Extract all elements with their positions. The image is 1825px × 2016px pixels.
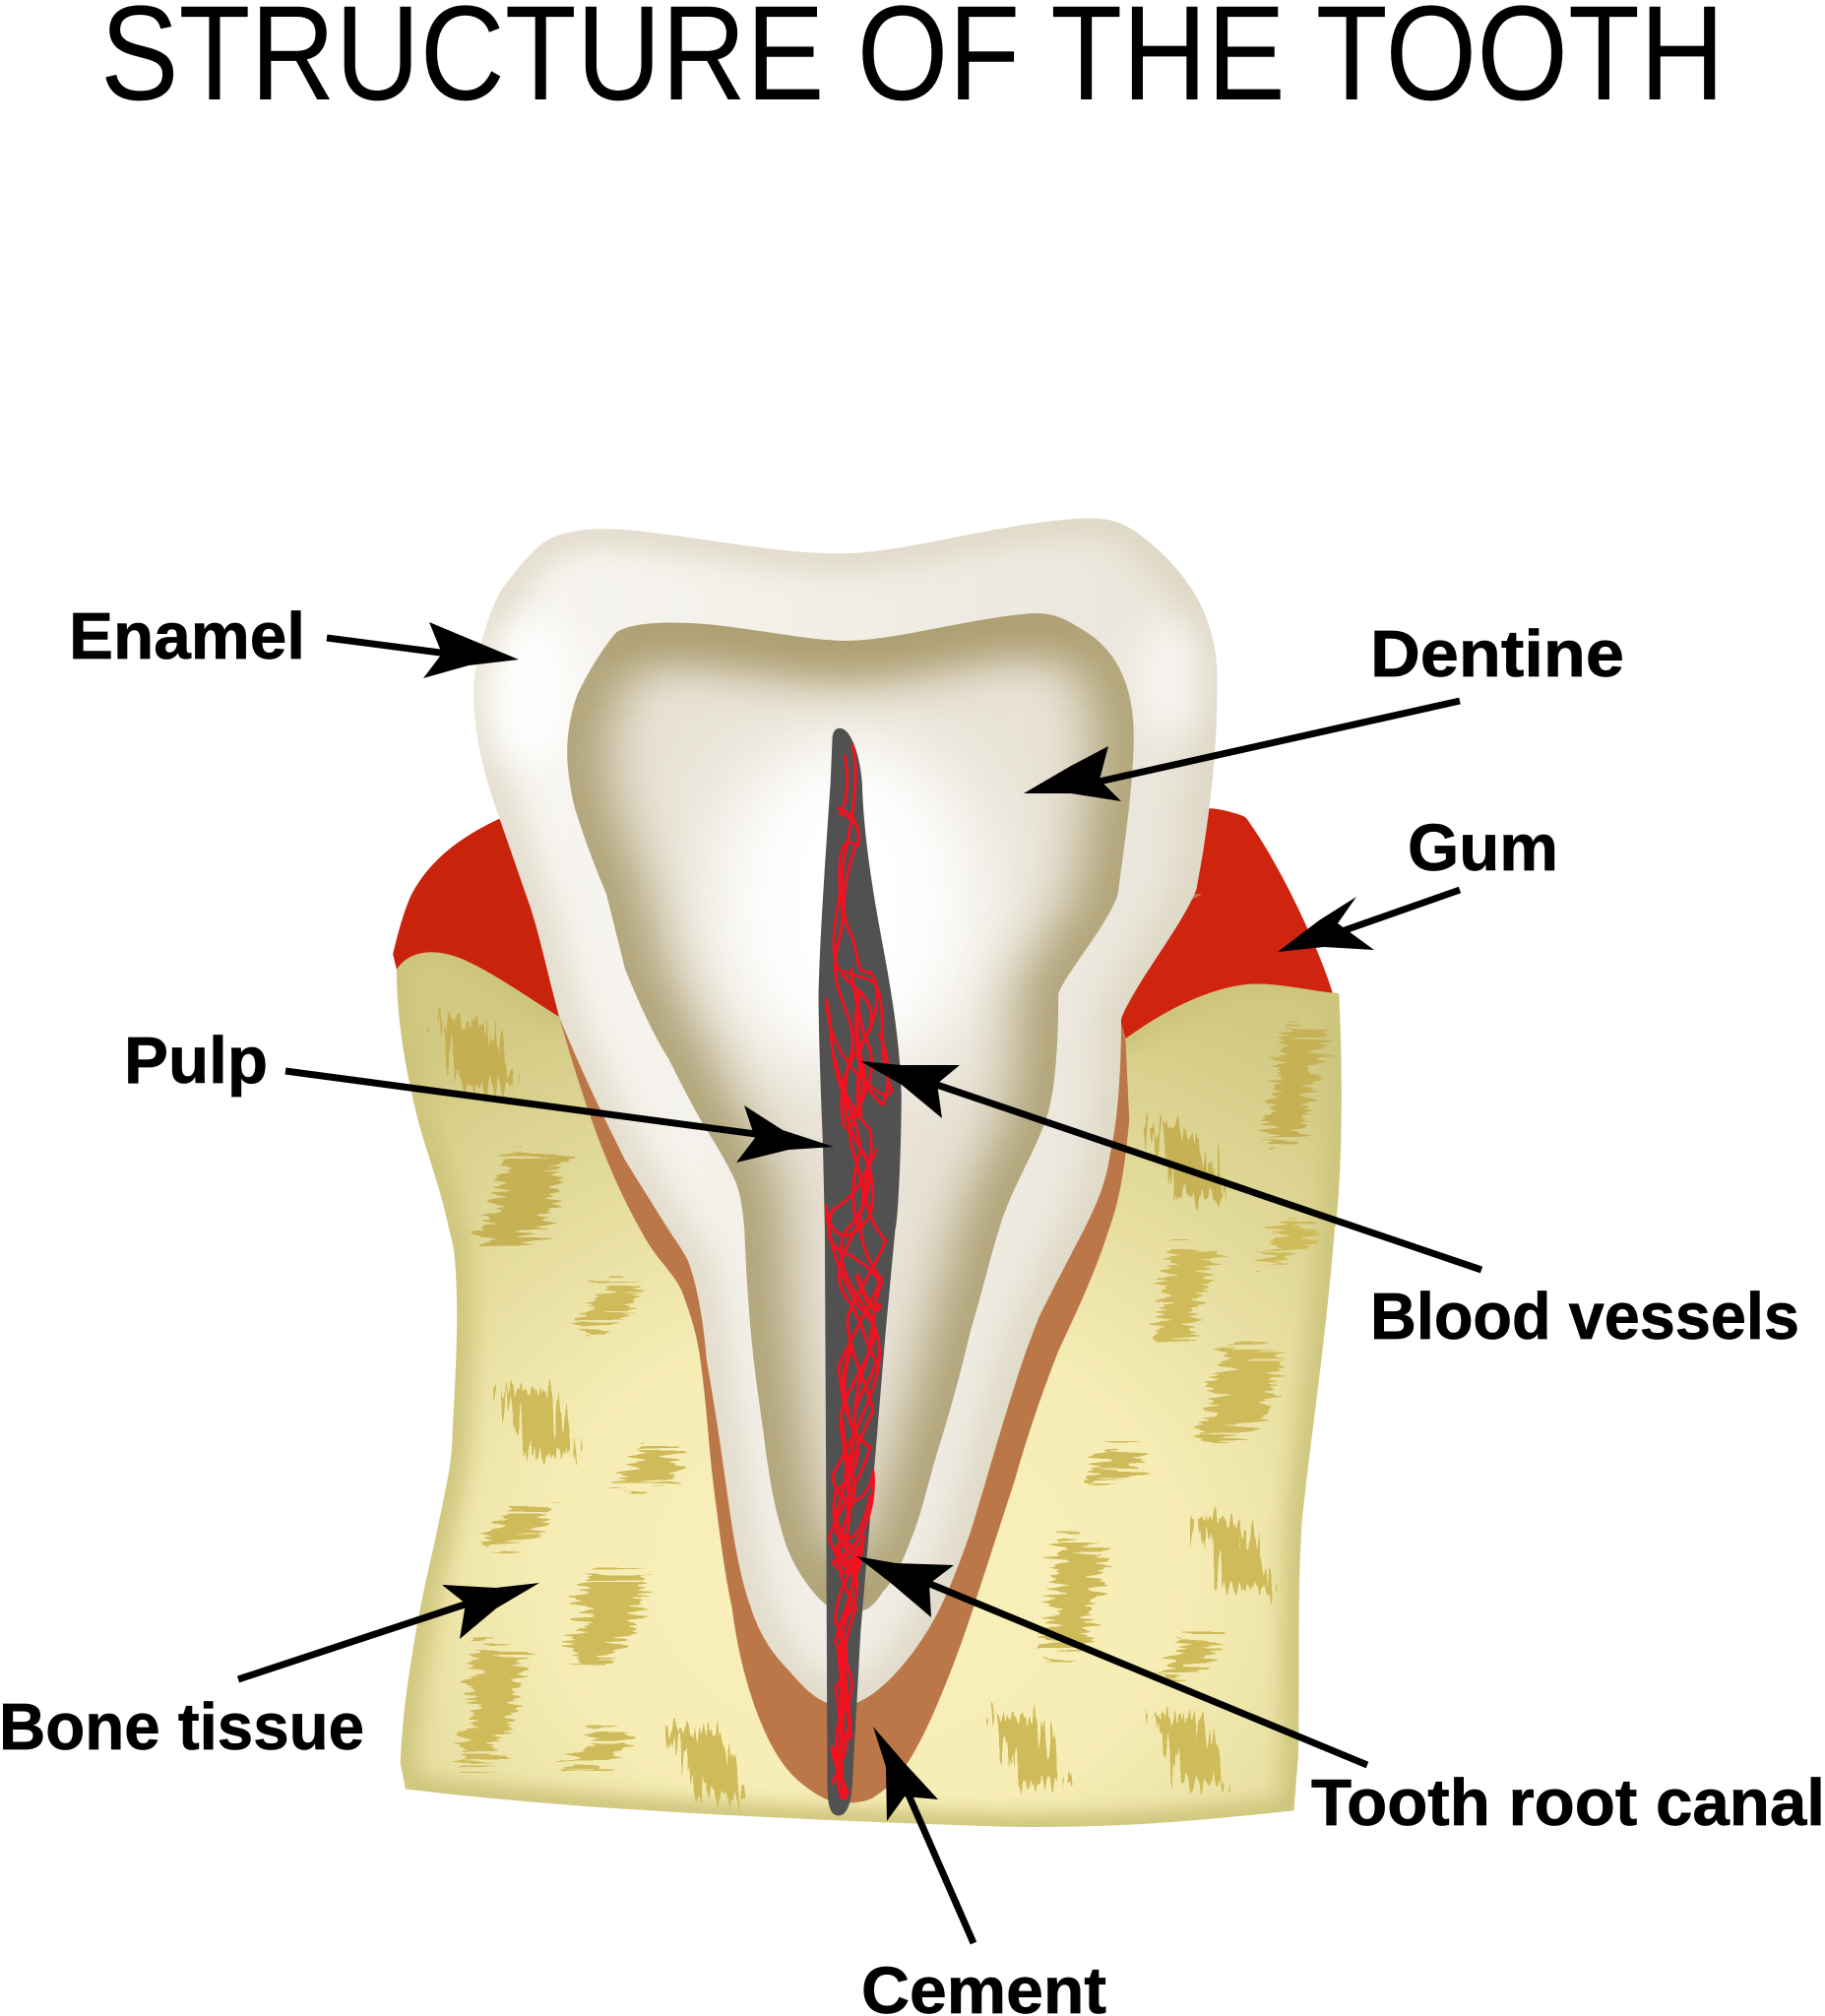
- label: Gum: Gum: [1408, 811, 1558, 885]
- tooth layers: [393, 518, 1333, 1815]
- pulp canal: [819, 728, 902, 1815]
- arrow: gum: [1278, 890, 1460, 952]
- label: Blood vessels: Blood vessels: [1370, 1280, 1799, 1354]
- label: Tooth root canal: Tooth root canal: [1311, 1766, 1825, 1840]
- label: Bone tissue: Bone tissue: [0, 1690, 364, 1764]
- bone patches: [435, 1019, 1325, 1800]
- arrow: pulp: [285, 1071, 834, 1163]
- arrow: dentine: [1024, 701, 1460, 801]
- blood vessels: [826, 746, 892, 1798]
- gum: left: [393, 819, 575, 1020]
- gum: right: [1120, 808, 1333, 1039]
- label: Dentine: Dentine: [1370, 617, 1624, 691]
- arrow: tooth root canal: [856, 1556, 1367, 1765]
- dentine: [567, 613, 1134, 1611]
- tooth diagram: [393, 518, 1342, 1827]
- arrow: cement: [873, 1727, 974, 1943]
- cement: [559, 894, 1203, 1803]
- arrow: blood vessels: [860, 1061, 1481, 1270]
- label: Enamel: Enamel: [69, 599, 305, 673]
- arrow: bone tissue: [238, 1583, 539, 1679]
- bone tissue: [397, 952, 1342, 1827]
- arrow: enamel: [327, 622, 519, 678]
- label: Pulp: Pulp: [124, 1024, 268, 1098]
- enamel: [473, 518, 1218, 1703]
